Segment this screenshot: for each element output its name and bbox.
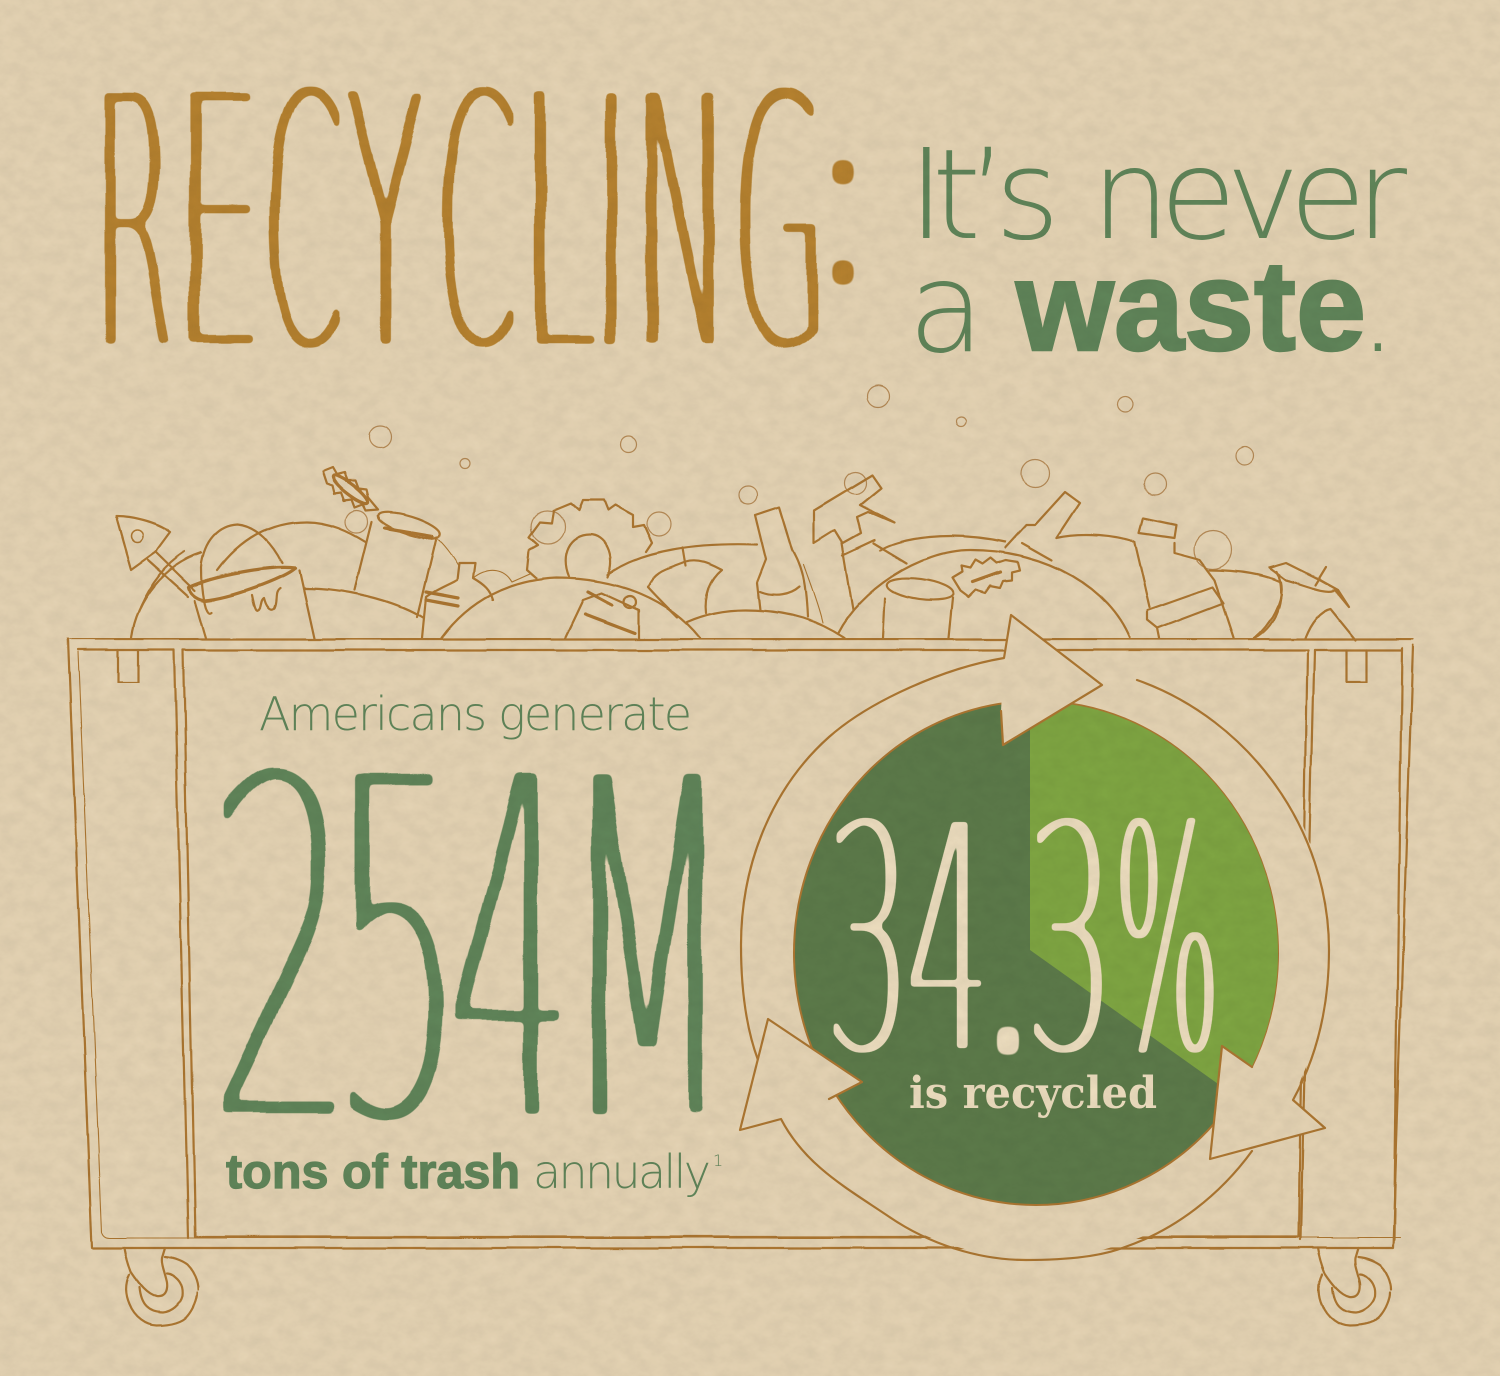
text: tons of trash annually — [226, 1145, 723, 1199]
illustration: dumpster bin body — [68, 640, 1413, 1326]
bin rim and top frame — [68, 639, 1413, 682]
title colon: : — [803, 57, 883, 337]
gear — [527, 500, 652, 578]
pie chart: 34.3% recycled — [794, 701, 1278, 1205]
pie: not recycled — [794, 701, 1278, 1205]
text: 34.3%: 3 — [826, 756, 910, 1127]
big number: 254M: 2 — [210, 676, 354, 1228]
wine bottle — [1005, 492, 1080, 560]
text: 34.3% — [826, 756, 1220, 1127]
text: is recycled: is recycled — [909, 1068, 1157, 1119]
subtitle: It's never a waste.: . — [1358, 236, 1398, 381]
big number: 254M — [210, 676, 731, 1229]
title: RECYCLING: Y — [344, 19, 426, 429]
text: decimal point: . — [965, 772, 1051, 1121]
arrow: right — [1137, 680, 1329, 1159]
text: tons of trash annually: 1 — [713, 1151, 723, 1170]
tin can with lid — [883, 558, 1020, 638]
title: RECYCLING: C — [261, 20, 343, 429]
text: Americans generate: Americans generate — [259, 687, 692, 741]
wheel: left — [125, 1248, 198, 1326]
subtitle: It's never a waste.: It’s — [908, 123, 1060, 268]
subtitle: It's never a waste.: waste — [1015, 235, 1366, 378]
text: tons of trash annually: annually — [533, 1145, 711, 1199]
subtitle: It's never a waste. — [908, 123, 1408, 381]
plastic bottle — [1135, 518, 1234, 638]
text: 34.3%: % — [1114, 757, 1220, 1127]
spray bottle — [814, 475, 907, 610]
apple and canister — [565, 548, 722, 638]
recycling ring backdrop — [742, 642, 1328, 1258]
subtitle: It's never a waste.: never — [1091, 123, 1408, 268]
subtitle: It's never a waste.: a — [908, 236, 985, 381]
shovel — [116, 517, 195, 608]
title: RECYCLING: G — [732, 20, 828, 430]
title: RECYCLING: L — [520, 20, 598, 430]
paint bucket — [189, 525, 314, 638]
domes of garbage — [131, 522, 1281, 638]
title: RECYCLING: E — [175, 20, 263, 430]
text: 34.3%: 3 — [1025, 756, 1115, 1126]
text: 34.3%: 4 — [907, 757, 989, 1127]
illustration: pile of trash above the bin — [116, 468, 1356, 640]
big number: 254M: 4 — [448, 678, 572, 1229]
apple core — [1254, 563, 1356, 640]
pie: recycled wedge — [1030, 702, 1278, 1096]
recycling arrows — [740, 615, 1329, 1260]
title: RECYCLING: R — [92, 19, 176, 429]
can with open lid — [322, 468, 442, 617]
big number: 254M: 5 — [332, 677, 464, 1229]
spray can — [422, 537, 530, 638]
text: tons of trash annually: tons of trash — [226, 1146, 520, 1199]
bubbles — [346, 385, 1253, 569]
title: RECYCLING: N — [632, 19, 732, 429]
wheel: right — [1318, 1248, 1391, 1326]
title: RECYCLING — [92, 19, 828, 430]
title: RECYCLING: I — [593, 19, 629, 429]
title: RECYCLING: C — [435, 20, 517, 429]
glass bottle — [755, 507, 822, 623]
big number: 254M: M — [563, 678, 731, 1229]
arrow: top — [741, 615, 1102, 1060]
arrow: bottom left — [740, 1019, 1252, 1260]
